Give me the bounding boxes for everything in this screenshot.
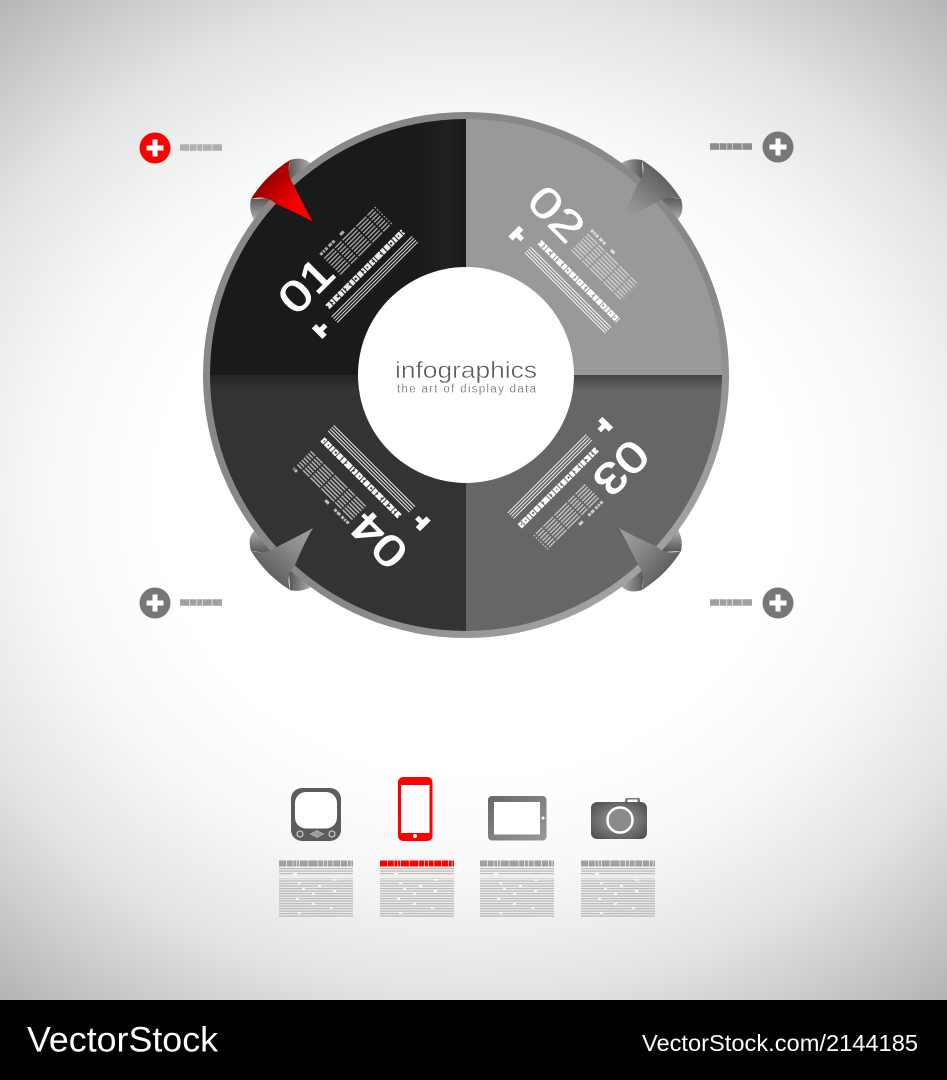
block heading [480,860,554,866]
segment title bars [540,242,618,321]
wheel chart [203,112,729,638]
icon: camera [591,798,647,839]
block heading [380,860,454,866]
block lines [279,868,353,917]
block heading [581,860,655,866]
segment rule lines [525,247,611,333]
callout top left [140,132,222,164]
label [180,144,222,151]
label [180,599,222,606]
number 04: 04 [341,501,418,578]
curl: red 01 [251,160,313,222]
segment body rows [571,234,638,301]
outer ring [203,112,729,638]
segment 02 content [500,176,657,333]
block heading [279,860,353,866]
segment title bars [322,439,400,516]
curl tabs behind wheel [250,159,682,591]
segment copy heading [320,203,372,255]
text block 1 [279,864,353,917]
segment 03 content [506,412,658,564]
icon: tv [291,788,341,841]
callout bottom right [710,588,794,618]
icon: grey plus [762,132,794,162]
centre title: infographics [395,357,537,383]
marker glyph [508,226,528,245]
icon: phone [398,777,432,841]
number 03: 03 [583,430,658,505]
segment title bars [520,449,597,526]
curl: grey 03 [619,528,681,590]
centre subtitle: the art of display data [397,384,537,396]
segment rule lines [332,236,418,323]
segment 02 background [466,119,722,375]
callout top right [710,132,794,162]
marker glyph [412,512,431,531]
segment rule lines [508,435,592,519]
segment copy heading [293,468,349,523]
text block 2 [380,864,454,917]
marker glyph [312,320,331,339]
footer url: VectorStock.com/2144185 [642,1030,918,1056]
text block 3 [480,864,554,917]
segment rule lines [328,425,415,512]
segment title bars [327,231,403,307]
centre white circle [358,267,574,483]
text block 4 [581,864,655,917]
segment copy heading [551,502,602,553]
curl: grey 04 [251,528,313,590]
block lines [480,868,554,917]
block lines [581,868,655,917]
callout bottom left [140,588,222,618]
footer bar [0,1000,947,1080]
segment 04 content [283,424,436,578]
icon: grey plus [140,588,170,618]
icon: grey plus [762,588,794,618]
number 02: 02 [518,176,594,253]
segment 03 background [466,375,722,631]
number 01: 01 [269,249,344,324]
marker glyph [594,417,613,436]
segment 04 background [210,375,466,631]
curl: grey 02 [619,160,681,222]
segment body rows [324,207,392,275]
label [710,599,752,606]
segment 01 content [269,192,419,341]
segment body rows [297,451,366,520]
segment body rows [534,485,599,549]
block lines [380,868,454,917]
segment 01 background [210,119,466,375]
label [710,143,752,150]
segment copy heading [591,230,642,281]
icon: tablet [488,796,546,840]
icon: red plus [140,132,170,164]
footer logo: VectorStock [27,1020,219,1060]
